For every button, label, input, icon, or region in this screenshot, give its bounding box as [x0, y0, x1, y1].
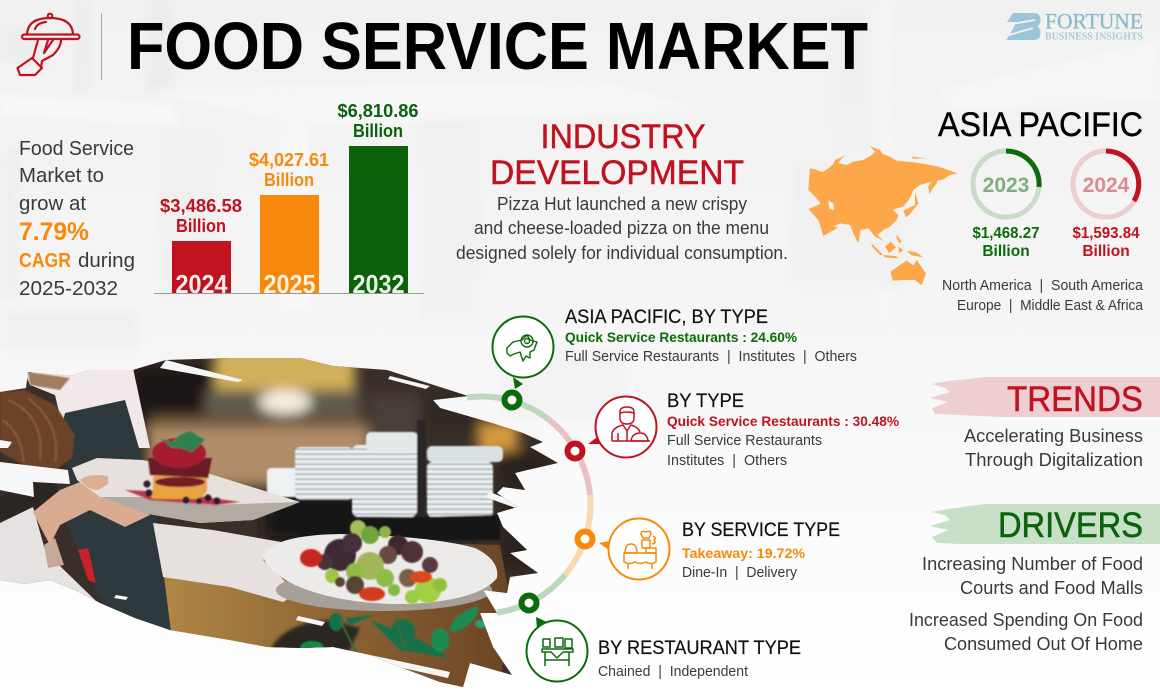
brush streaks: [0, 360, 530, 678]
plate two: [263, 534, 497, 611]
bar 2032: 2032: [352, 269, 404, 299]
other regions: North America | South America: [942, 278, 1144, 294]
logo icon: cloche and hand: [18, 14, 80, 75]
icon: Asia Pacific by type: [492, 316, 554, 389]
CAGR text block: during: [78, 249, 135, 272]
plate one: [72, 458, 300, 523]
panel: trends: TRENDS: [1007, 380, 1143, 419]
bar 2032: $6,810.86: [338, 101, 418, 121]
photo: waiter carrying plates: [0, 345, 560, 690]
panel: trends: Accelerating Business: [964, 425, 1143, 446]
text: by type: BY TYPE: [667, 390, 744, 412]
icon: by service type (buffet): [599, 518, 670, 580]
hand: [33, 482, 150, 544]
panel: trends: Through Digitalization: [965, 449, 1143, 470]
CAGR text block: Food Service: [19, 137, 134, 160]
text: by service type: [682, 519, 840, 581]
ring: 2023 value: Billion: [982, 243, 1030, 260]
bar 2032: Billion: [353, 121, 403, 141]
CAGR text block: [19, 137, 135, 300]
CAGR text block: Market to: [19, 164, 104, 187]
dessert tower: [125, 431, 240, 505]
bar 2032: [338, 101, 418, 299]
text: by type: Full Service Restaurants: [667, 433, 822, 449]
right arm sleeve: [153, 523, 297, 602]
panel: industry development: [456, 118, 788, 263]
icon: by type (waiter): [588, 396, 656, 458]
text: by type: Quick Service Restaurants : 30.48%: [667, 413, 900, 429]
ring: 2023 value: [972, 151, 1040, 260]
plants: [300, 606, 487, 660]
icon: by restaurant type (table): [526, 617, 588, 682]
bar 2024: Billion: [176, 216, 226, 236]
other regions: Europe | Middle East & Africa: [957, 298, 1144, 314]
bar 2025: $4,027.61: [249, 150, 329, 170]
heading: Asia Pacific: ASIA PACIFIC: [938, 106, 1143, 144]
ring: 2024 value: 2024: [1083, 174, 1130, 197]
logo: Fortune Business Insights: [1006, 8, 1143, 42]
logo: Fortune Business Insights: FORTUNE: [1045, 8, 1143, 34]
CAGR text block: grow at: [19, 192, 86, 215]
title: FOOD SERVICE MARKET: [127, 9, 868, 84]
panel: industry development: and cheese-loaded pizza on the menu: [474, 218, 769, 238]
other regions: [942, 278, 1144, 314]
text: by restaurant type: Chained | Independent: [598, 664, 748, 680]
header divider: [101, 13, 102, 80]
segmented arc timeline: [467, 396, 590, 612]
ring: 2024 value: $1,593.84: [1072, 225, 1140, 242]
panel: drivers: [909, 504, 1160, 654]
bar 2025: Billion: [264, 170, 314, 190]
salad: [300, 520, 447, 604]
waiter apron: [56, 400, 171, 630]
CAGR text block: 7.79%: [19, 218, 89, 246]
bar chart: [154, 101, 424, 299]
hair: [0, 372, 75, 474]
text: by type: [667, 390, 900, 469]
logo: Fortune Business Insights: BUSINESS INSIGHTS: [1045, 32, 1143, 42]
text: Asia Pacific by type: [565, 306, 857, 365]
waiter shirt: [25, 368, 150, 448]
CAGR text block: 2025-2032: [19, 277, 118, 300]
map: Asia Pacific: [808, 146, 957, 285]
CAGR text block: CAGR: [19, 249, 71, 272]
bar 2025: [249, 150, 329, 299]
ring: 2023 value: $1,468.27: [972, 225, 1040, 242]
floor: [150, 540, 510, 690]
text: by restaurant type: BY RESTAURANT TYPE: [598, 637, 801, 659]
panel: industry development: designed solely for individual consumption.: [456, 243, 788, 263]
bar 2024: $3,486.58: [160, 196, 242, 216]
panel: trends: [930, 377, 1160, 470]
text: by type: Institutes | Others: [667, 453, 787, 469]
left sleeve: [0, 507, 96, 601]
panel: drivers: DRIVERS: [998, 506, 1143, 545]
text: by restaurant type: [598, 637, 801, 680]
bar 2024: 2024: [176, 269, 228, 299]
text: by service type: Dine-In | Delivery: [682, 565, 798, 581]
text: Asia Pacific by type: Quick Service Restaurants : 24.60%: [565, 329, 798, 345]
panel: drivers: Courts and Food Malls: [960, 577, 1143, 598]
panel: drivers: Consumed Out Of Home: [944, 633, 1143, 654]
ring: 2024 value: [1072, 151, 1140, 260]
panel: industry development: Pizza Hut launched a new crispy: [497, 194, 747, 214]
panel: drivers: Increasing Number of Food: [922, 553, 1143, 574]
text: Asia Pacific by type: ASIA PACIFIC, BY TYPE: [565, 306, 768, 328]
ring: 2023 value: 2023: [983, 174, 1029, 197]
text: by service type: Takeaway: 19.72%: [682, 545, 806, 561]
panel: industry development: DEVELOPMENT: [490, 154, 744, 192]
panel: industry development: INDUSTRY: [540, 118, 706, 156]
ring: 2024 value: Billion: [1082, 243, 1130, 260]
text: by service type: BY SERVICE TYPE: [682, 519, 840, 541]
panel: drivers: Increased Spending On Food: [909, 609, 1143, 630]
text: Asia Pacific by type: Full Service Restaurants | Institutes | Others: [565, 349, 857, 365]
bar 2024: [160, 196, 242, 299]
timeline nodes: [504, 392, 592, 610]
bar 2025: 2025: [264, 269, 316, 299]
